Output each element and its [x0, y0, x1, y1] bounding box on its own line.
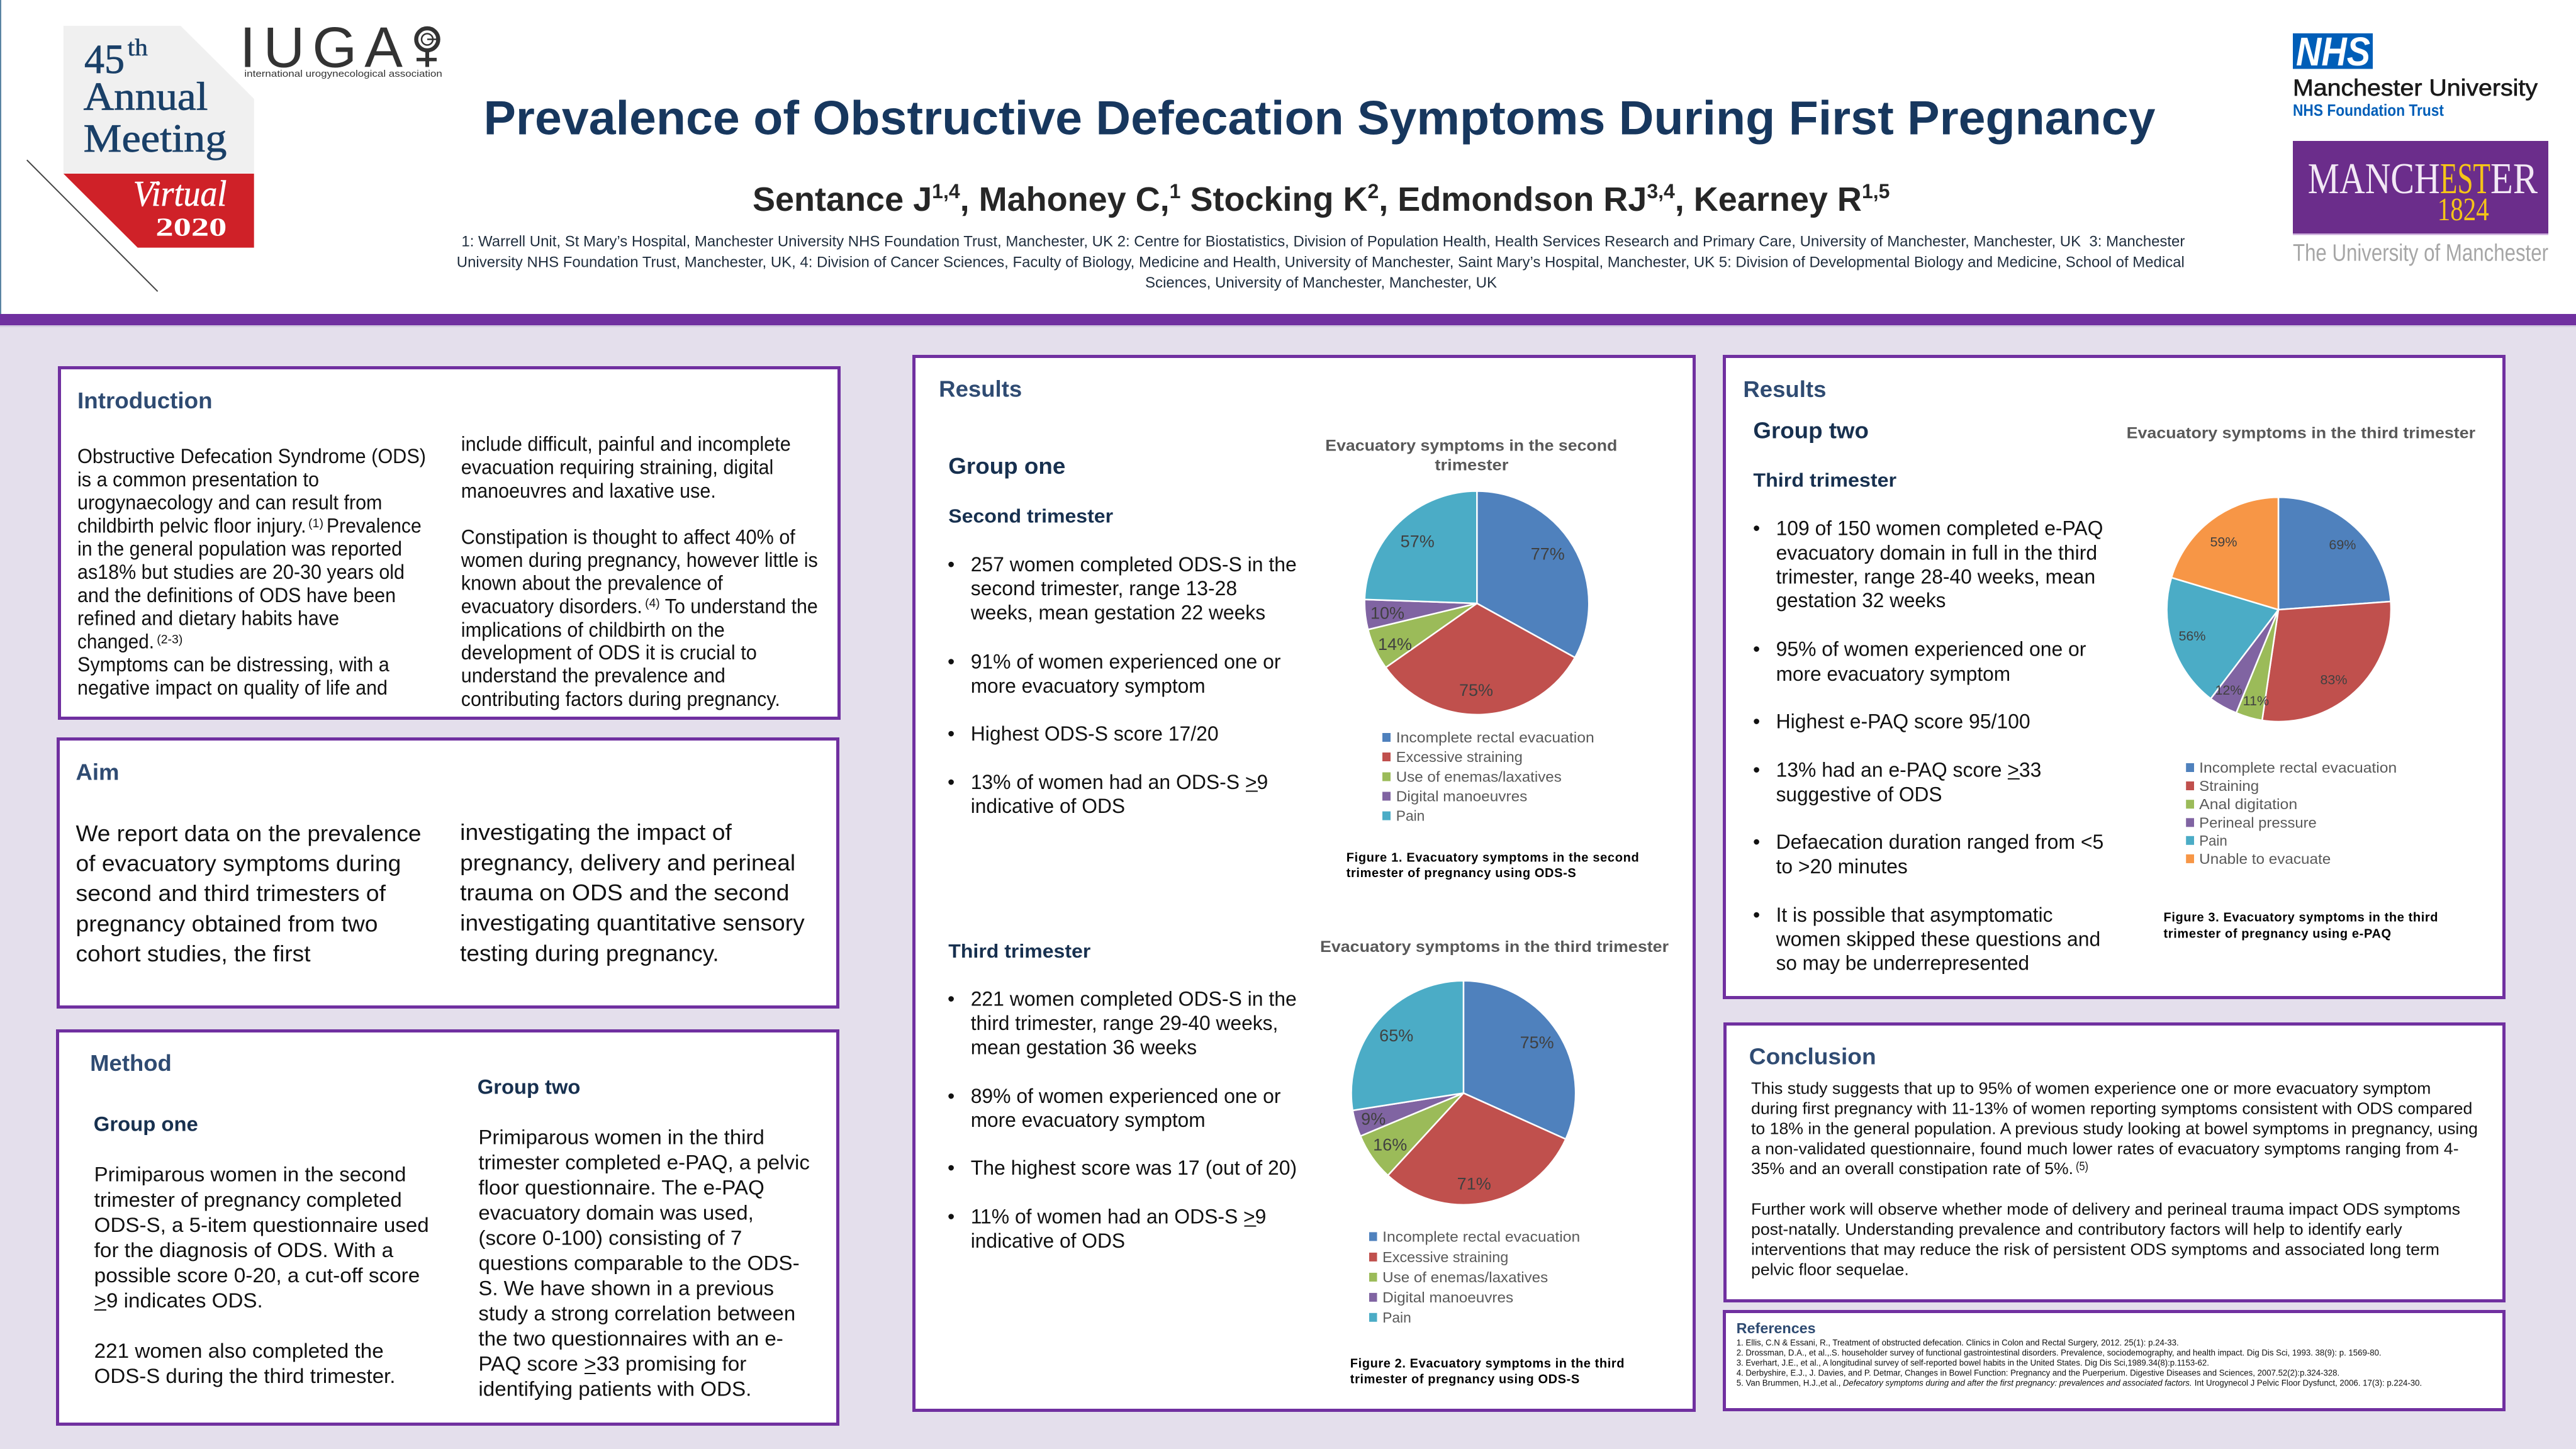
- chart: figure 1 pie second trimester: Pain: [1396, 808, 1425, 824]
- bullet list: third trimester: mean gestation 36 weeks: [971, 1036, 1197, 1059]
- chart: figure 2 pie third trimester: 75%: [1520, 1033, 1554, 1052]
- text block: method group one: >9 indicates ODS.: [94, 1289, 263, 1312]
- chart: figure 3 pie third trimester e-PAQ: 83%: [2320, 672, 2348, 687]
- text block: method group two: floor questionnaire. The e-PAQ: [478, 1177, 764, 1199]
- logo: The University of Manchester: 1824: [2438, 192, 2489, 228]
- chart: figure 1 pie second trimester: Use of enemas/laxatives: [1396, 769, 1562, 785]
- text block: references list: 4. Derbyshire, E.J., J. Davies, and P. Detmar, Changes in Bowel Function: Pregnancy and the Puerperium. Digestive Diseases and Sciences, 2007.52(2):p.324-328.: [1737, 1368, 2339, 1378]
- chart: figure 3 pie third trimester e-PAQ: Perineal pressure: [2199, 814, 2317, 831]
- chart: figure 3 pie third trimester e-PAQ: 69%: [2329, 537, 2356, 552]
- bullet list: group two results: trimester, range 28-40 weeks, mean: [1776, 565, 2095, 588]
- text block: method group two: [478, 1126, 810, 1401]
- bullet list: second trimester: more evacuatory symptom: [971, 674, 1206, 697]
- heading: method: Method: [90, 1050, 172, 1076]
- text block: introduction right column: implications of childbirth on the: [461, 618, 725, 641]
- text block: references list: 1. Ellis, C.N & Essani, R., Treatment of obstructed defecation. Clinics in Colon and Rectal Surgery, 2012. 25(1): p.24-33.: [1737, 1337, 2179, 1347]
- text block: introduction right column: women during pregnancy, however little is: [461, 549, 818, 571]
- bullet list: group two results: •: [1753, 638, 1760, 661]
- text block: method group two: PAQ score >33 promising for: [478, 1353, 747, 1375]
- bullet list: third trimester: third trimester, range 29-40 weeks,: [971, 1012, 1278, 1034]
- authors: Sentance J: [753, 181, 932, 218]
- caption: figure 3: trimester of pregnancy using e-PAQ: [2163, 927, 2391, 941]
- chart: figure 1 pie second trimester: Digital manoeuvres: [1396, 788, 1527, 804]
- bullet list: group two results: [1753, 517, 2103, 974]
- text block: method group one: ODS-S, a 5-item questionnaire used: [94, 1214, 429, 1236]
- authors: , Kearney R: [1675, 181, 1862, 218]
- text block: introduction left column: Prevalence: [327, 514, 422, 537]
- panel: aim: [58, 739, 838, 1007]
- bullet list: third trimester: 221 women completed ODS-S in the: [971, 988, 1297, 1010]
- bullet list: group two results: 109 of 150 women completed e-PAQ: [1776, 517, 2103, 539]
- caption: figure 2: [1350, 1357, 1625, 1387]
- authors: Stocking K: [1180, 181, 1368, 218]
- bullet list: third trimester: •: [948, 988, 955, 1010]
- text block: introduction right column: manoeuvres and laxative use.: [461, 479, 716, 502]
- bullet list: group two results: women skipped these questions and: [1776, 928, 2100, 951]
- text block: conclusion: 35% and an overall constipation rate of 5%.: [1751, 1159, 2073, 1178]
- bullet list: group two results: suggestive of ODS: [1776, 783, 1942, 805]
- subheading: second trimester: Second trimester: [948, 505, 1113, 527]
- chart: figure 3 pie third trimester e-PAQ: Straining: [2199, 778, 2259, 794]
- authors: 3,4: [1647, 180, 1675, 203]
- text block: introduction right column: development of ODS it is crucial to: [461, 641, 757, 664]
- chart: figure 2 pie third trimester: 65%: [1379, 1026, 1413, 1045]
- text block: method group one: trimester of pregnancy completed: [94, 1189, 402, 1211]
- logo: NHS Manchester University NHS Foundation Trust: [2293, 29, 2538, 120]
- text block: introduction left column: as18% but studies are 20-30 years old: [77, 561, 405, 583]
- authors: 2: [1368, 180, 1379, 203]
- text block: method group one: ODS-S during the third trimester.: [94, 1365, 395, 1387]
- text block: method group two: (score 0-100) consisting of 7: [478, 1227, 742, 1250]
- bullet list: second trimester: 257 women completed ODS-S in the: [971, 553, 1297, 576]
- chart: figure 3 pie third trimester e-PAQ: [2127, 424, 2475, 867]
- text block: method group two: Primiparous women in the third: [478, 1126, 764, 1149]
- panel: results group two: [1724, 356, 2504, 998]
- header purple bar: [0, 314, 2576, 325]
- text block: conclusion: Further work will observe whether mode of delivery and perineal trauma impact ODS symptoms: [1751, 1200, 2460, 1219]
- heading: introduction: Introduction: [77, 388, 213, 413]
- bullet list: group two results: •: [1753, 710, 1760, 732]
- text block: method group one: Primiparous women in the second: [94, 1163, 406, 1186]
- chart: figure 1 pie second trimester: 57%: [1401, 532, 1435, 551]
- text block: introduction left column: [77, 445, 426, 699]
- caption: figure 1: Figure 1. Evacuatory symptoms in the second: [1347, 851, 1639, 864]
- text block: method group one: possible score 0-20, a cut-off score: [94, 1264, 420, 1287]
- bullet list: third trimester: indicative of ODS: [971, 1229, 1125, 1252]
- logo: 45th Annual Meeting Virtual 2020: th: [128, 35, 148, 61]
- text block: aim left column: cohort studies, the first: [76, 941, 311, 966]
- text block: aim left column: second and third trimesters of: [76, 880, 386, 906]
- text block: introduction left column: urogynaecology and can result from: [77, 491, 382, 514]
- text block: introduction right column: understand the prevalence and: [461, 664, 725, 686]
- chart: figure 1 pie second trimester: Incomplete rectal evacuation: [1396, 729, 1594, 746]
- chart: figure 3 pie third trimester e-PAQ: 56%: [2178, 629, 2206, 644]
- chart: figure 3 pie third trimester e-PAQ: 59%: [2210, 534, 2237, 549]
- chart: figure 2 pie third trimester: Evacuatory symptoms in the third trimester: [1320, 938, 1669, 956]
- text block: conclusion: during first pregnancy with 11-13% of women reporting symptoms consistent with ODS compared: [1751, 1099, 2472, 1117]
- authors: , Edmondson RJ: [1379, 181, 1647, 218]
- bullet list: second trimester: [948, 553, 1297, 817]
- title: Prevalence of Obstructive Defecation Symptoms During First Pregnancy: [483, 92, 2156, 145]
- subheading: method group two: Group two: [478, 1076, 580, 1099]
- affiliations: 1: Warrell Unit, St Mary’s Hospital, Manchester University NHS Foundation Trust, Manchester, UK 2: Centre for Biostatistics, Division of Population Health, Health Services Research and Primary Care, University of Manchester, Manchester, UK 3: Manchester: [461, 233, 2185, 250]
- text block: method group two: study a strong correlation between: [478, 1302, 795, 1325]
- text block: introduction left column: changed.: [77, 630, 154, 652]
- chart: figure 1 pie second trimester: Excessive straining: [1396, 749, 1523, 765]
- chart: figure 1 pie second trimester: [1325, 437, 1617, 824]
- logo: 45th Annual Meeting Virtual 2020: [27, 26, 254, 291]
- affiliations: University NHS Foundation Trust, Manchester, UK, 4: Division of Cancer Sciences, Faculty of Biology, Medicine and Health, University of Manchester, Saint Mary’s Hospital, Manchester, UK 5: Division of Developmental Biology and Medicine, School of Medical: [457, 254, 2185, 271]
- text block: introduction left column: is a common presentation to: [77, 468, 319, 491]
- text block: conclusion: a non-validated questionnaire, found much lower rates of evacuatory symptoms ranging from 4-: [1751, 1139, 2459, 1158]
- text block: introduction left column: (1): [308, 517, 323, 530]
- bullet list: third trimester: more evacuatory symptom: [971, 1109, 1206, 1131]
- text block: method group two: S. We have shown in a previous: [478, 1277, 774, 1300]
- text block: method group two: evacuatory domain was used,: [478, 1202, 754, 1224]
- text block: references list: 5. Van Brummen, H.J.,et al.,: [1737, 1378, 1841, 1388]
- text block: aim left column: of evacuatory symptoms during: [76, 851, 401, 876]
- chart: figure 3 pie third trimester e-PAQ: Unable to evacuate: [2199, 851, 2331, 867]
- heading: conclusion: Conclusion: [1749, 1044, 1876, 1070]
- logo: The University of Manchester: MANCH: [2308, 155, 2440, 203]
- text block: conclusion: pelvic floor sequelae.: [1751, 1260, 1909, 1279]
- text block: introduction right column: known about the prevalence of: [461, 572, 723, 595]
- authors: 1: [1170, 180, 1180, 203]
- panel: results group one: [914, 356, 1694, 1411]
- affiliations: [457, 233, 2185, 291]
- bullet list: group two results: 95% of women experienced one or: [1776, 638, 2086, 661]
- text block: method group two: questions comparable to the ODS-: [478, 1252, 800, 1275]
- logo: IUGA: IUGA: [240, 16, 403, 79]
- heading: results: Results: [1743, 376, 1826, 402]
- bullet list: second trimester: weeks, mean gestation 22 weeks: [970, 601, 1265, 624]
- chart: figure 2 pie third trimester: 9%: [1361, 1109, 1386, 1128]
- text block: introduction left column: in the general population was reported: [77, 537, 402, 560]
- chart: figure 2 pie third trimester: Incomplete rectal evacuation: [1382, 1228, 1580, 1245]
- text block: conclusion: (5): [2076, 1160, 2088, 1173]
- subheading: group two: Group two: [1753, 417, 1869, 443]
- chart: figure 1 pie second trimester: trimester: [1435, 457, 1509, 474]
- bullet list: third trimester: 11% of women had an ODS-S >9: [971, 1206, 1266, 1228]
- bullet list: group two results: gestation 32 weeks: [1776, 589, 1946, 612]
- logo: IUGA: international urogynecological association: [244, 69, 442, 79]
- text block: method group two: the two questionnaires with an e-: [478, 1328, 783, 1350]
- text block: introduction right column: evacuation requiring straining, digital: [461, 456, 773, 478]
- chart: figure 2 pie third trimester: [1320, 938, 1669, 1326]
- bullet list: group two results: more evacuatory symptom: [1776, 663, 2010, 685]
- bullet list: second trimester: Highest ODS-S score 17/20: [971, 722, 1219, 745]
- text block: references list: 3. Everhart, J.E., et al., A longitudinal survey of self-reported bowel habits in the United States. Dig Dis Sci,1989.34(8):p.1153-62.: [1737, 1357, 2209, 1367]
- panel: conclusion: [1725, 1024, 2504, 1301]
- bullet list: third trimester: •: [948, 1206, 955, 1228]
- chart: figure 1 pie second trimester: 75%: [1459, 681, 1493, 700]
- text block: conclusion: to 18% in the general population. A previous study looking at bowel symptoms in pregnancy, using: [1751, 1119, 2478, 1138]
- text block: introduction left column: Symptoms can be distressing, with a: [77, 653, 389, 676]
- text block: aim left column: pregnancy obtained from two: [76, 911, 378, 936]
- caption: figure 2: Figure 2. Evacuatory symptoms in the third: [1350, 1357, 1625, 1370]
- bullet list: group two results: Defaecation duration ranged from <5: [1776, 831, 2103, 853]
- text block: conclusion: interventions that may reduce the risk of persistent ODS symptoms and associated long term: [1751, 1240, 2439, 1259]
- bullet list: second trimester: •: [948, 722, 955, 745]
- chart: figure 1 pie second trimester: 10%: [1370, 603, 1404, 622]
- chart: figure 3 pie third trimester e-PAQ: 12%: [2215, 683, 2243, 698]
- chart: figure 2 pie third trimester: Excessive straining: [1382, 1249, 1508, 1265]
- bullet list: second trimester: •: [948, 553, 955, 576]
- subheading: method group one: Group one: [94, 1113, 198, 1136]
- text block: method group one: 221 women also completed the: [94, 1340, 384, 1362]
- text block: aim right column: investigating the impact of: [460, 819, 732, 845]
- authors: , Mahoney C,: [960, 181, 1170, 218]
- chart: figure 3 pie third trimester e-PAQ: Evacuatory symptoms in the third trimester: [2127, 424, 2475, 442]
- bullet list: third trimester: The highest score was 17 (out of 20): [971, 1156, 1297, 1179]
- logo: The University of Manchester: EST: [2440, 155, 2490, 203]
- bullet list: second trimester: second trimester, range 13-28: [971, 577, 1237, 600]
- text block: introduction left column: childbirth pelvic floor injury.: [77, 514, 306, 537]
- subheading: third trimester: Third trimester: [948, 940, 1090, 962]
- text block: method group one: [94, 1163, 429, 1387]
- chart: figure 1 pie second trimester: 77%: [1531, 545, 1565, 564]
- bullet list: group two results: 13% had an e-PAQ score >33: [1776, 758, 2041, 781]
- bullet list: group two results: Highest e-PAQ score 95/100: [1776, 710, 2030, 732]
- chart: figure 1 pie second trimester: 14%: [1378, 635, 1412, 654]
- chart: figure 3 pie third trimester e-PAQ: Anal digitation: [2199, 796, 2297, 812]
- text block: introduction right column: Constipation is thought to affect 40% of: [461, 526, 795, 549]
- text block: introduction left column: negative impact on quality of life and: [77, 676, 388, 699]
- chart: figure 3 pie third trimester e-PAQ: Incomplete rectal evacuation: [2199, 759, 2397, 776]
- chart: figure 2 pie third trimester: 71%: [1457, 1174, 1491, 1193]
- text block: references list: [1737, 1337, 2422, 1388]
- caption: figure 1: trimester of pregnancy using ODS-S: [1347, 866, 1576, 880]
- subheading: group one: Group one: [948, 453, 1065, 479]
- bullet list: second trimester: 91% of women experienced one or: [971, 651, 1281, 673]
- authors: 1,4: [932, 180, 960, 203]
- text block: references list: 2. Drossman, D.A., et al.,.S. householder survey of functional gastrointestinal disorders. Prevalence, sociodemography, and health impact. Dig Dis Sci, 1993. 38(9): p. 1569-80.: [1737, 1347, 2382, 1357]
- bullet list: third trimester: 89% of women experienced one or: [971, 1085, 1281, 1107]
- bullet list: group two results: evacuatory domain in full in the third: [1776, 542, 2097, 564]
- logo: 45th Annual Meeting Virtual 2020: Annual: [84, 74, 208, 118]
- logo: NHS Manchester University NHS Foundation Trust: NHS Foundation Trust: [2293, 101, 2444, 120]
- chart: figure 2 pie third trimester: Pain: [1382, 1309, 1411, 1326]
- bullet list: third trimester: •: [948, 1085, 955, 1107]
- text block: references list: Int Urogynecol J Pelvic Floor Dysfunct, 2006. 17(3): p.224-30.: [2195, 1378, 2422, 1388]
- chart: figure 3 pie third trimester e-PAQ: 11%: [2243, 693, 2269, 708]
- text block: introduction right column: (4): [645, 597, 660, 610]
- logo: 45th Annual Meeting Virtual 2020: Virtual: [133, 173, 227, 214]
- text block: introduction right column: [461, 433, 818, 710]
- bullet list: group two results: to >20 minutes: [1776, 855, 1908, 878]
- text block: aim right column: investigating quantitative sensory: [460, 910, 805, 936]
- bullet list: second trimester: 13% of women had an ODS-S >9: [971, 771, 1268, 793]
- logo: NHS Manchester University NHS Foundation Trust: Manchester University: [2293, 75, 2538, 101]
- text block: method group two: identifying patients with ODS.: [478, 1378, 751, 1401]
- text block: aim left column: We report data on the prevalence: [76, 820, 422, 846]
- caption: figure 3: Figure 3. Evacuatory symptoms in the third: [2163, 911, 2438, 925]
- text block: references list: Defecatory symptoms during and after the first pregnancy: prevalences and associated factors.: [1843, 1378, 2192, 1388]
- text block: introduction right column: evacuatory disorders.: [461, 595, 642, 618]
- logo: 45th Annual Meeting Virtual 2020: 2020: [155, 212, 227, 241]
- caption: figure 3: [2163, 911, 2438, 941]
- bullet list: group two results: It is possible that asymptomatic: [1776, 904, 2052, 926]
- bullet list: second trimester: •: [948, 771, 955, 793]
- panel: references: [1724, 1311, 2504, 1409]
- authors: 1,5: [1862, 180, 1890, 203]
- logo: The University of Manchester: [2293, 141, 2548, 267]
- text block: aim right column: pregnancy, delivery and perineal: [460, 849, 795, 875]
- text block: aim right column: trauma on ODS and the second: [460, 880, 789, 905]
- bullet list: third trimester: •: [948, 1156, 955, 1179]
- bullet list: second trimester: •: [948, 651, 955, 673]
- panel: method: [58, 1031, 838, 1424]
- caption: figure 1: [1347, 851, 1639, 880]
- text block: introduction right column: include difficult, painful and incomplete: [461, 433, 791, 456]
- heading: references: References: [1737, 1320, 1816, 1336]
- text block: introduction left column: refined and dietary habits have: [77, 607, 339, 630]
- subheading: third trimester: Third trimester: [1753, 469, 1896, 491]
- bullet list: second trimester: indicative of ODS: [971, 795, 1125, 817]
- text block: aim right column: testing during pregnancy.: [460, 940, 719, 966]
- text block: method group one: for the diagnosis of ODS. With a: [94, 1239, 393, 1262]
- bullet list: group two results: •: [1753, 831, 1760, 853]
- text block: introduction left column: Obstructive Defecation Syndrome (ODS): [77, 445, 426, 467]
- heading: aim: Aim: [76, 759, 120, 785]
- logo: The University of Manchester: ER: [2490, 155, 2538, 203]
- caption: figure 2: trimester of pregnancy using ODS-S: [1350, 1373, 1579, 1387]
- text block: conclusion: This study suggests that up to 95% of women experience one or more evacuatory symptom: [1751, 1079, 2431, 1098]
- chart: figure 3 pie third trimester e-PAQ: Pain: [2199, 832, 2227, 849]
- text block: method group two: trimester completed e-PAQ, a pelvic: [478, 1151, 810, 1174]
- chart: figure 2 pie third trimester: 16%: [1373, 1135, 1407, 1154]
- text block: introduction left column: (2-3): [157, 634, 182, 647]
- bullet list: group two results: •: [1753, 758, 1760, 781]
- heading: results: Results: [939, 376, 1022, 401]
- bullet list: group two results: •: [1753, 904, 1760, 926]
- bullet list: group two results: •: [1753, 517, 1760, 539]
- panel: introduction: [59, 367, 839, 719]
- text block: introduction right column: contributing factors during pregnancy.: [461, 688, 780, 710]
- chart: figure 2 pie third trimester: Use of enemas/laxatives: [1382, 1269, 1548, 1285]
- text block: aim right column: [460, 819, 805, 966]
- logo: 45th Annual Meeting Virtual 2020: Meeting: [84, 116, 227, 160]
- chart: figure 1 pie second trimester: Evacuatory symptoms in the second: [1325, 437, 1617, 454]
- logo: NHS Manchester University NHS Foundation Trust: NHS: [2296, 29, 2370, 74]
- text block: conclusion: [1751, 1079, 2478, 1279]
- text block: conclusion: post-natally. Understanding prevalence and contributory factors will help to identify early: [1751, 1220, 2402, 1239]
- text block: introduction right column: To understand the: [665, 595, 818, 618]
- logo: 45th Annual Meeting Virtual 2020: 45: [84, 36, 125, 82]
- text block: introduction left column: and the definitions of ODS have been: [77, 584, 396, 607]
- bullet list: third trimester: [948, 988, 1297, 1252]
- chart: figure 2 pie third trimester: Digital manoeuvres: [1382, 1289, 1513, 1306]
- text block: aim left column: [76, 820, 422, 966]
- affiliations: Sciences, University of Manchester, Manchester, UK: [1145, 274, 1497, 291]
- bullet list: group two results: so may be underrepresented: [1776, 951, 2029, 974]
